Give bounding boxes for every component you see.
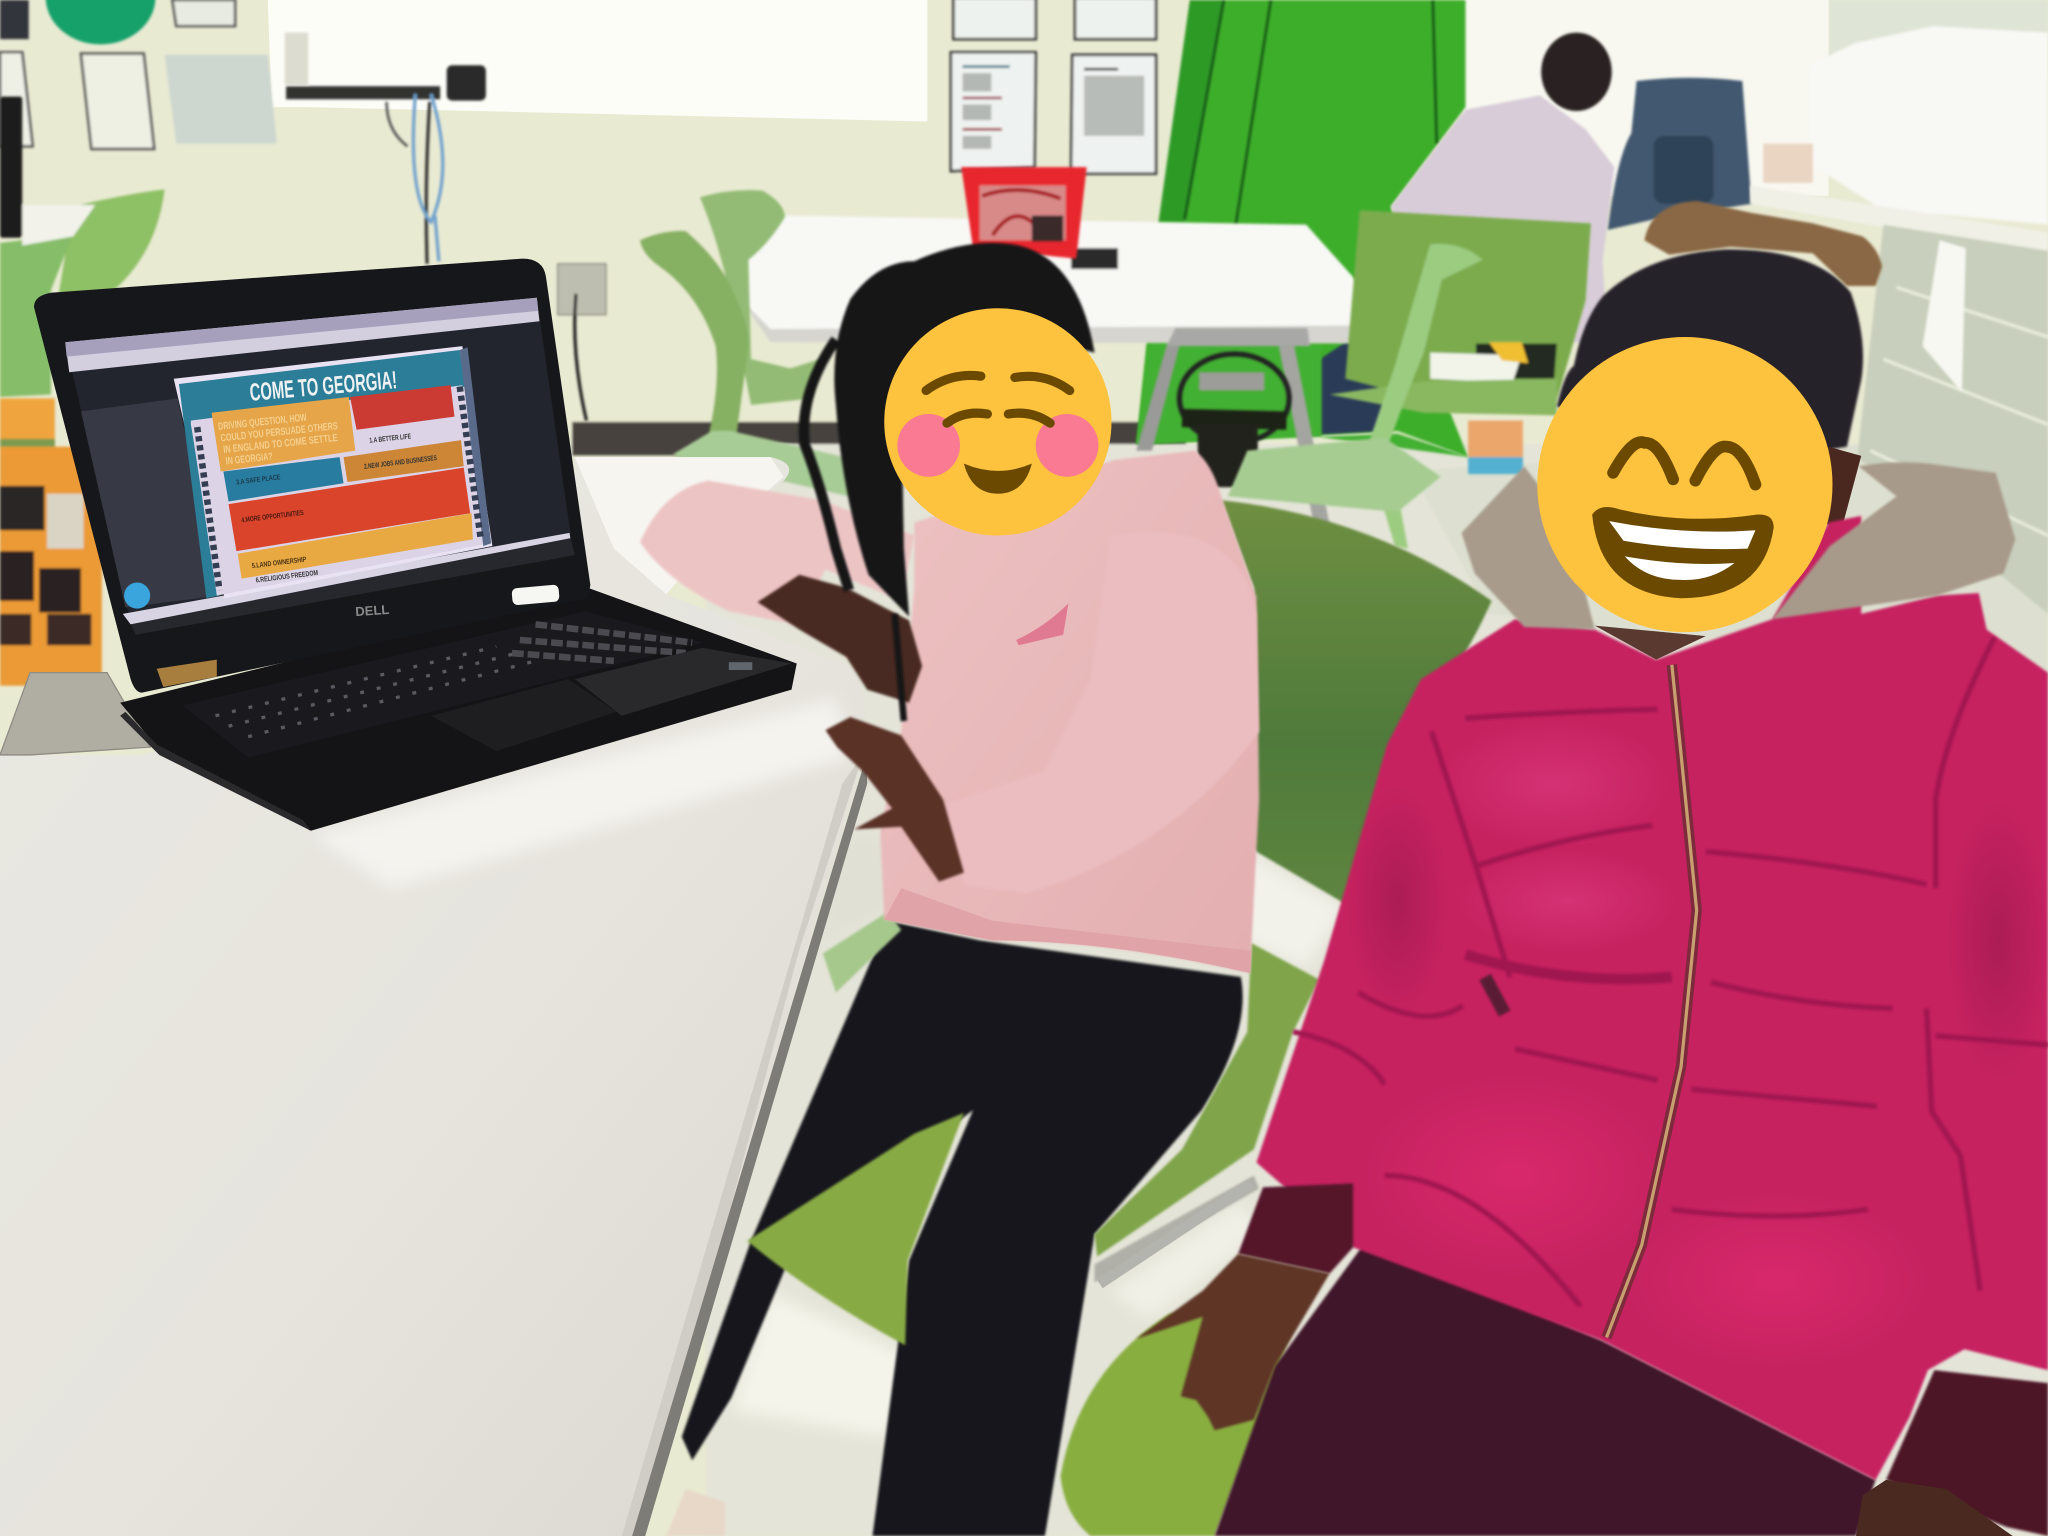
dark blue chair: [1608, 78, 1752, 230]
window, left: [268, 0, 927, 121]
assistant button: [124, 583, 150, 609]
hoodie body: [880, 451, 1259, 973]
arm and hand on table: [758, 575, 922, 703]
poster panel: DRIVING QUESTION, HOW: [218, 413, 307, 433]
window, right: [1463, 0, 1829, 196]
block: land ownership: [238, 513, 473, 579]
block: a better life: [350, 385, 455, 430]
poster title: COME TO GEORGIA!: [249, 367, 398, 407]
label: religious freedom: 6.RELIGIOUS FREEDOM: [255, 569, 318, 585]
screen: [65, 298, 571, 624]
grey chair bar: [1100, 1183, 1251, 1284]
power strip and cables: [285, 33, 606, 421]
poster panel: 2.NEW JOBS AND BUSINESSES: [364, 454, 437, 471]
emoji face: big grin: [1537, 337, 1832, 632]
red crate: [961, 167, 1087, 259]
green chair: girl 1 backrest: [1221, 500, 1492, 904]
laptop lid: [34, 259, 590, 693]
hand on table edge: [825, 717, 964, 882]
white table in foreground: [0, 457, 867, 1536]
poster panel: COULD YOU PERSUADE OTHERS: [220, 421, 338, 444]
brand label: DELL: [355, 602, 390, 619]
chair seat, girl 1: [666, 912, 1319, 1536]
hoodie logo: [1016, 603, 1068, 645]
coat cuff right: [1886, 1370, 2048, 1536]
bun: [1644, 201, 1882, 286]
zipper: [1607, 665, 1697, 1337]
film-strip edges: [197, 427, 219, 590]
poster panel: 1.A BETTER LIFE: [369, 432, 412, 445]
wall posters and frames: [0, 0, 1156, 174]
taskbar: [123, 533, 571, 624]
leggings: [682, 921, 1243, 1536]
background person in light shirt: [1310, 33, 1614, 435]
poster panel: IN ENGLAND TO COME SETTLE: [223, 433, 338, 456]
driving question block: [212, 397, 355, 472]
chin and neck: [1595, 626, 1706, 660]
emoji face: blushing smile: [884, 308, 1112, 536]
floor light patches: [731, 836, 1345, 1437]
coat cuff left: [1238, 1183, 1353, 1273]
hoodie sleeve right: [943, 532, 1259, 893]
pants: [1215, 1241, 1876, 1536]
block: more opportunities: [229, 468, 470, 551]
girl 2 in magenta coat: [1061, 201, 2048, 1536]
printer and cabinets on right: [1750, 26, 2048, 614]
coat highlights and shadows: [1345, 718, 2048, 1371]
hoodie arm left: [640, 481, 914, 624]
green curtain: [1136, 0, 1468, 457]
poster panel: [174, 346, 492, 598]
poster panel: IN GEORGIA?: [225, 452, 273, 467]
poster panel: 4.MORE OPPORTUNITIES: [241, 509, 304, 524]
laptop with Come to Georgia poster on screen: [34, 259, 797, 831]
ear and neck: [1822, 447, 1861, 529]
browser bar: [65, 298, 539, 372]
chair arm, girl 2: [1061, 1293, 1306, 1536]
right hand: [1856, 1480, 2013, 1536]
coat quilting: [1293, 637, 2048, 1306]
girl 1 in pink hoodie: [640, 243, 1319, 1536]
hair: [1557, 249, 1863, 470]
block: new jobs: [344, 440, 464, 482]
fur hood: [1462, 466, 1595, 630]
hoodie hem: [884, 888, 1251, 973]
plant in black basket: [1179, 354, 1289, 487]
hand on chair arm: [1136, 1254, 1330, 1430]
background bucket: [1468, 421, 1523, 474]
orange crate with sunglasses: [0, 398, 102, 686]
green classroom chairs in background: [0, 97, 1591, 549]
coat: [1256, 516, 2048, 1480]
poster panel: 3.A SAFE PLACE: [236, 473, 281, 487]
hair braids: [804, 243, 1095, 721]
green floor fabric under table: [1136, 344, 1469, 457]
block: a safe place: [223, 457, 344, 502]
laptop base: [120, 588, 797, 831]
background white table: [739, 216, 1396, 525]
poster panel: 5.LAND OWNERSHIP: [251, 556, 307, 570]
